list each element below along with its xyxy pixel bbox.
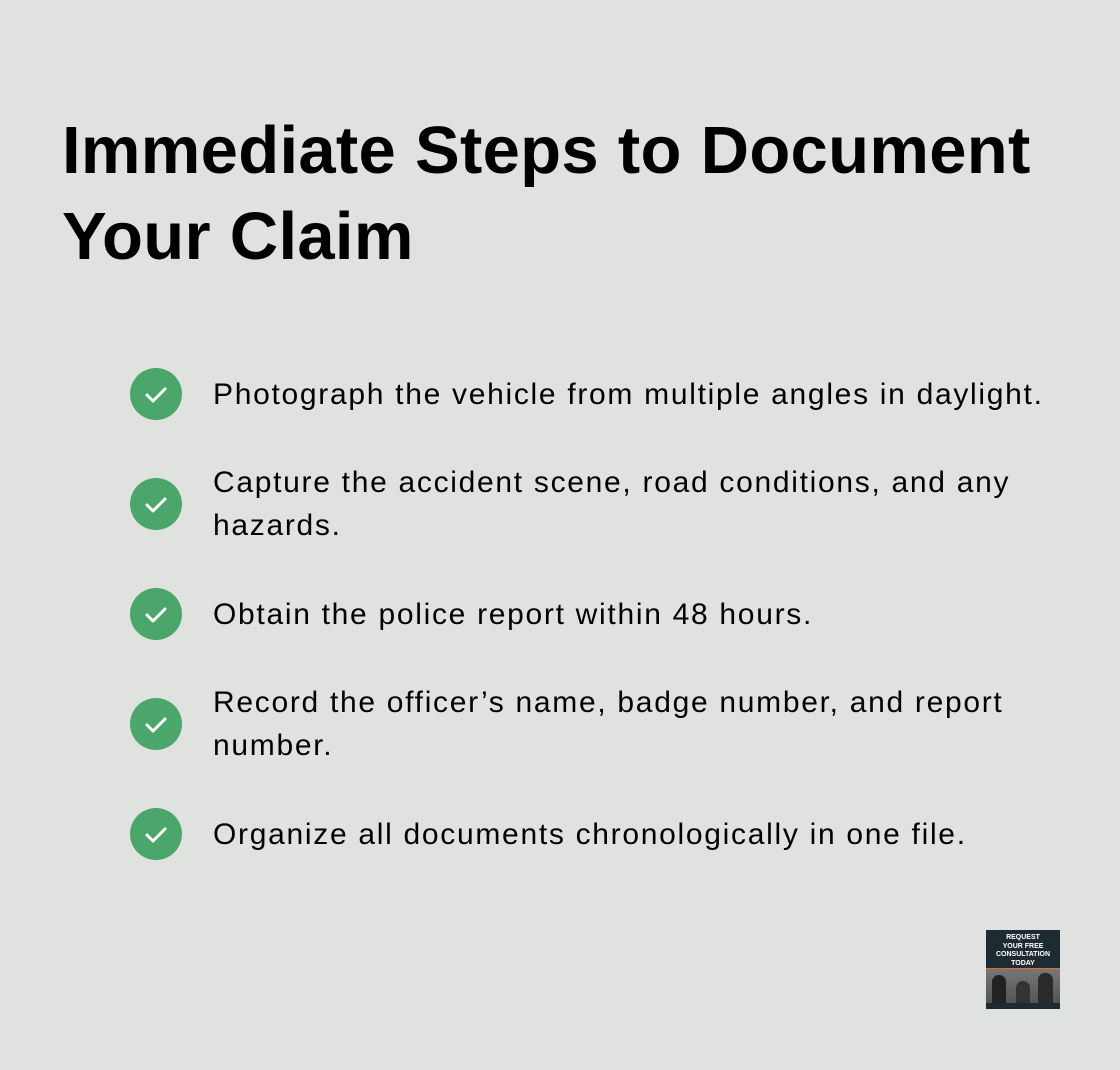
badge text: TODAY <box>1011 960 1035 966</box>
badge text: CONSULTATION <box>996 951 1050 958</box>
text <box>213 686 1003 762</box>
item 1 <box>130 368 1044 420</box>
text: hazards. <box>213 509 342 542</box>
text: Capture the accident scene, road conditions, and any <box>213 466 1010 499</box>
text: Obtain the police report within 48 hours. <box>213 598 813 631</box>
text: number. <box>213 729 333 762</box>
badge text: REQUEST <box>1006 934 1040 941</box>
badge: consultation <box>986 930 1060 1009</box>
item 5 <box>130 808 967 860</box>
item 2 <box>130 466 1010 542</box>
icon: check <box>130 698 182 750</box>
text: Photograph the vehicle from multiple angles in daylight. <box>213 378 1044 411</box>
badge text: YOUR FREE <box>1003 942 1043 950</box>
title: Immediate Steps to Document Your Claim <box>62 113 1031 274</box>
icon: check <box>130 588 182 640</box>
badge text <box>996 934 1050 966</box>
icon: check <box>130 478 182 530</box>
item 3 <box>130 588 813 640</box>
text: Record the officer’s name, badge number, and report <box>213 686 1003 719</box>
icon: check <box>130 368 182 420</box>
text <box>213 466 1010 542</box>
icon: check <box>130 808 182 860</box>
badge photo <box>986 969 1060 1003</box>
text: Organize all documents chronologically in one file. <box>213 818 967 851</box>
item 4 <box>130 686 1003 762</box>
